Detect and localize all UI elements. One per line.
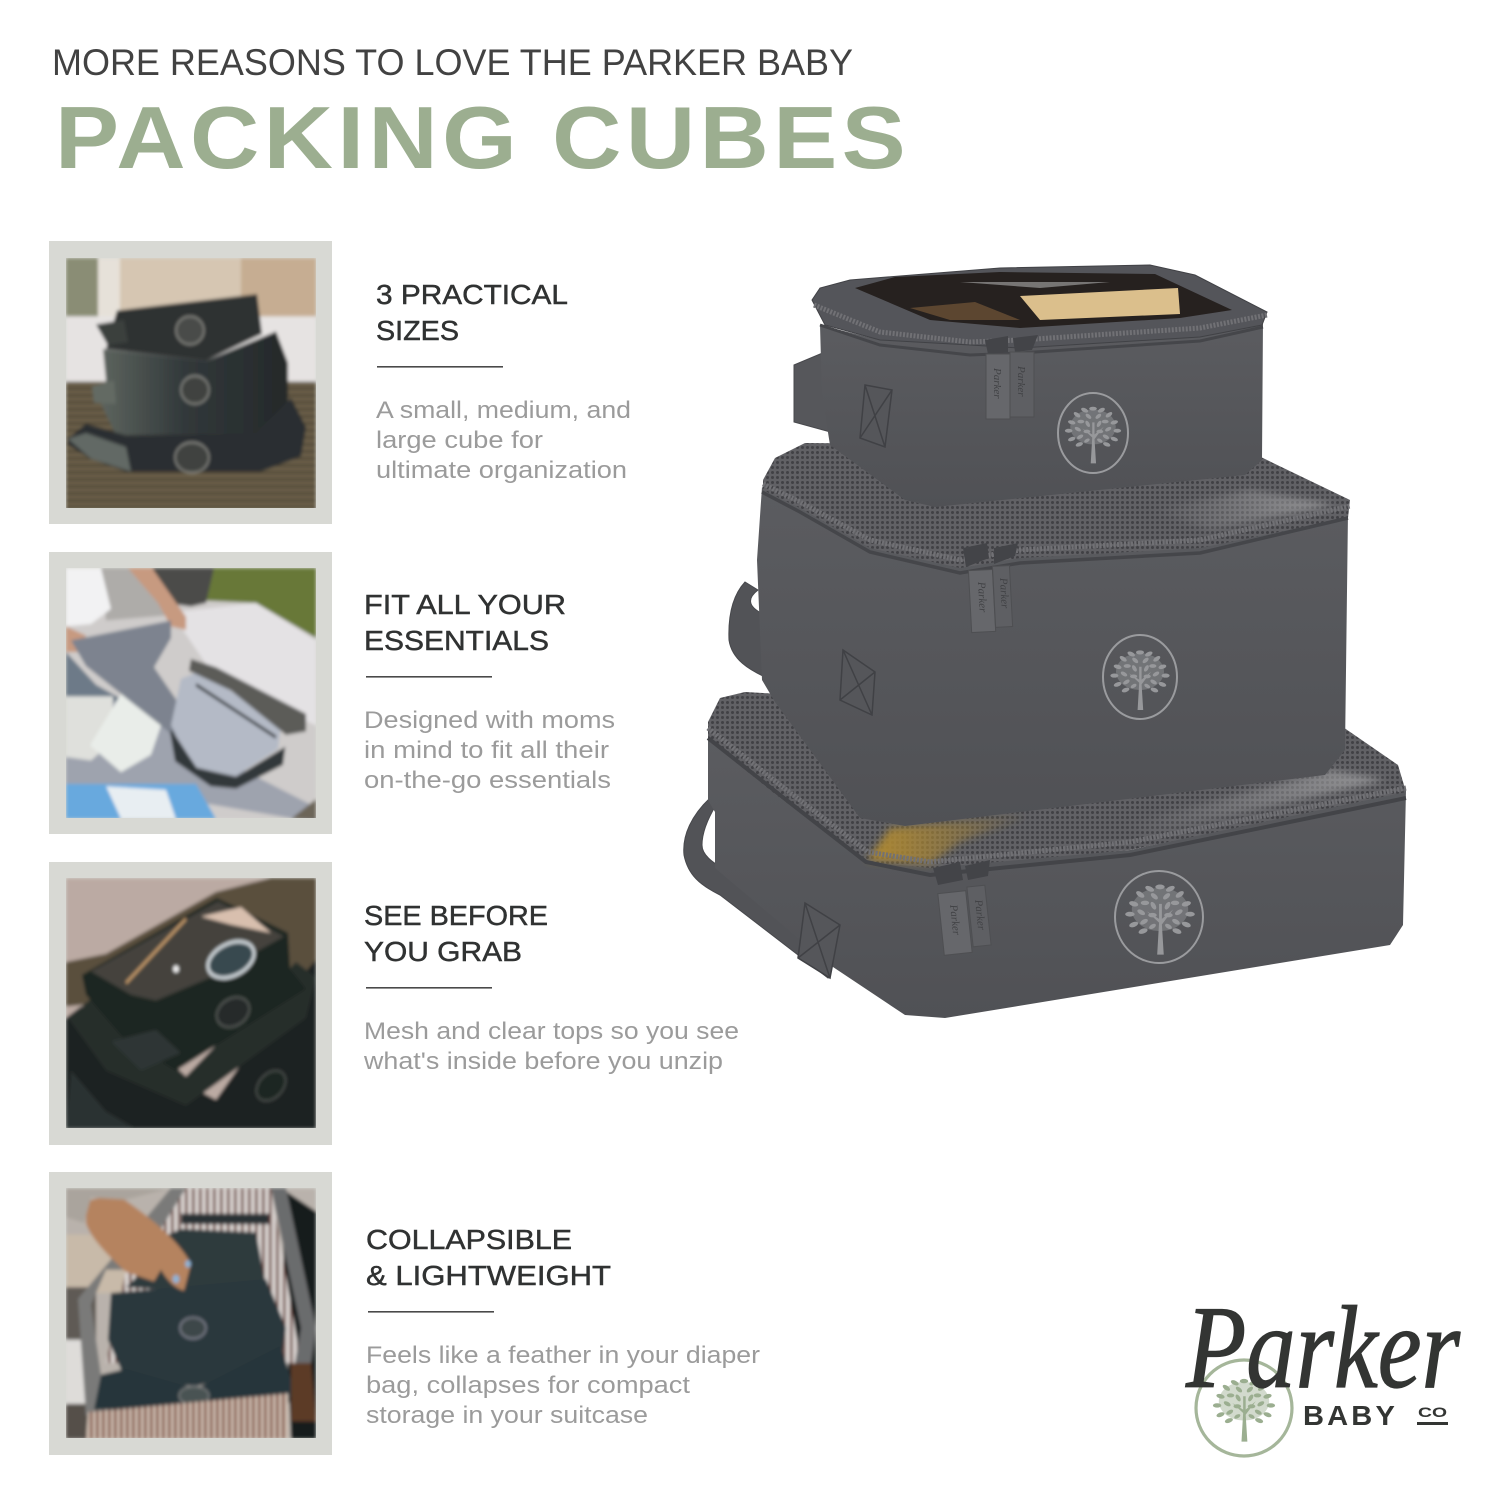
middle cube body xyxy=(757,487,1348,826)
large cube zipper pulls xyxy=(933,860,991,955)
small cube zipper xyxy=(814,305,1267,342)
description: on-the-go essentials xyxy=(364,767,611,794)
photo: cubes inside a diaper bag xyxy=(66,1188,316,1438)
description: ultimate organization xyxy=(376,457,627,484)
title: PACKING CUBES xyxy=(55,88,910,187)
photo frame xyxy=(49,241,332,524)
description: bag, collapses for compact xyxy=(366,1372,690,1399)
middle cube zipper pulls: Parker xyxy=(975,581,989,613)
heading: YOU GRAB xyxy=(364,936,522,967)
photo: packing jeans on a picnic blanket xyxy=(66,568,316,818)
description: Mesh and clear tops so you see xyxy=(364,1018,739,1045)
middle cube handle patch xyxy=(840,650,875,715)
subtitle: MORE REASONS TO LOVE THE PARKER BABY xyxy=(52,42,853,83)
panel: collapsible and lightweight xyxy=(49,1172,760,1455)
heading: 3 PRACTICAL xyxy=(376,279,568,310)
description xyxy=(376,397,631,484)
heading: & LIGHTWEIGHT xyxy=(366,1260,611,1291)
middle cube zipper pulls: Parker xyxy=(997,577,1011,609)
description: A small, medium, and xyxy=(376,397,631,424)
small cube zipper pulls xyxy=(985,335,1038,419)
photo: stacked cubes on a table xyxy=(66,258,316,508)
large cube xyxy=(684,692,1406,1018)
logo: Parker Baby Co xyxy=(1185,1282,1461,1456)
large cube zipper pulls: Parker xyxy=(947,903,962,936)
large cube logo xyxy=(1115,871,1203,963)
middle cube mesh top xyxy=(763,443,1350,568)
middle cube zipper xyxy=(763,484,1350,560)
logo co mark: CO xyxy=(1418,1404,1447,1420)
large cube zipper pulls: Parker xyxy=(972,898,987,931)
large cube body xyxy=(708,735,1406,1018)
small cube zipper pulls: Parker xyxy=(991,367,1003,399)
panel: 3 practical sizes xyxy=(49,241,631,524)
large cube handle patch xyxy=(798,903,840,978)
panel: see before you grab xyxy=(49,862,739,1145)
small cube top with clear window xyxy=(812,265,1267,348)
photo frame xyxy=(49,862,332,1145)
product photo: stack of three packing cubes xyxy=(684,265,1406,1018)
middle cube logo xyxy=(1103,635,1177,719)
heading: ESSENTIALS xyxy=(364,625,549,656)
description: storage in your suitcase xyxy=(366,1402,648,1429)
small cube handle xyxy=(794,352,892,447)
small cube zipper pulls: Parker xyxy=(1015,365,1027,397)
heading: FIT ALL YOUR xyxy=(364,589,566,620)
large cube handle xyxy=(684,798,840,978)
heading xyxy=(364,900,548,967)
description: in mind to fit all their xyxy=(364,737,609,764)
small cube handle patch xyxy=(860,385,892,447)
heading: COLLAPSIBLE xyxy=(366,1224,572,1255)
middle cube handle xyxy=(729,582,875,715)
description xyxy=(366,1342,760,1429)
middle cube xyxy=(729,443,1350,826)
heading: SEE BEFORE xyxy=(364,900,548,931)
heading xyxy=(376,279,568,346)
description xyxy=(363,1018,739,1075)
photo frame xyxy=(49,1172,332,1455)
description xyxy=(364,707,615,794)
description: what's inside before you unzip xyxy=(363,1048,723,1075)
photo frame xyxy=(49,552,332,834)
small cube body xyxy=(820,320,1263,507)
heading xyxy=(364,589,566,656)
small cube xyxy=(794,265,1267,507)
description: large cube for xyxy=(376,427,543,454)
small cube logo xyxy=(1058,393,1128,473)
photo: clear top cube xyxy=(66,878,316,1128)
logo co mark xyxy=(1417,1404,1448,1425)
heading xyxy=(366,1224,611,1291)
panel: fit all your essentials xyxy=(49,552,615,834)
logo word baby: BABY xyxy=(1303,1400,1398,1431)
large cube zipper xyxy=(708,728,1406,862)
logo tree emblem xyxy=(1196,1360,1292,1456)
description: Designed with moms xyxy=(364,707,615,734)
large cube mesh top xyxy=(708,692,1406,868)
description: Feels like a feather in your diaper xyxy=(366,1342,760,1369)
heading: SIZES xyxy=(376,315,459,346)
middle cube zipper pulls xyxy=(963,543,1018,633)
